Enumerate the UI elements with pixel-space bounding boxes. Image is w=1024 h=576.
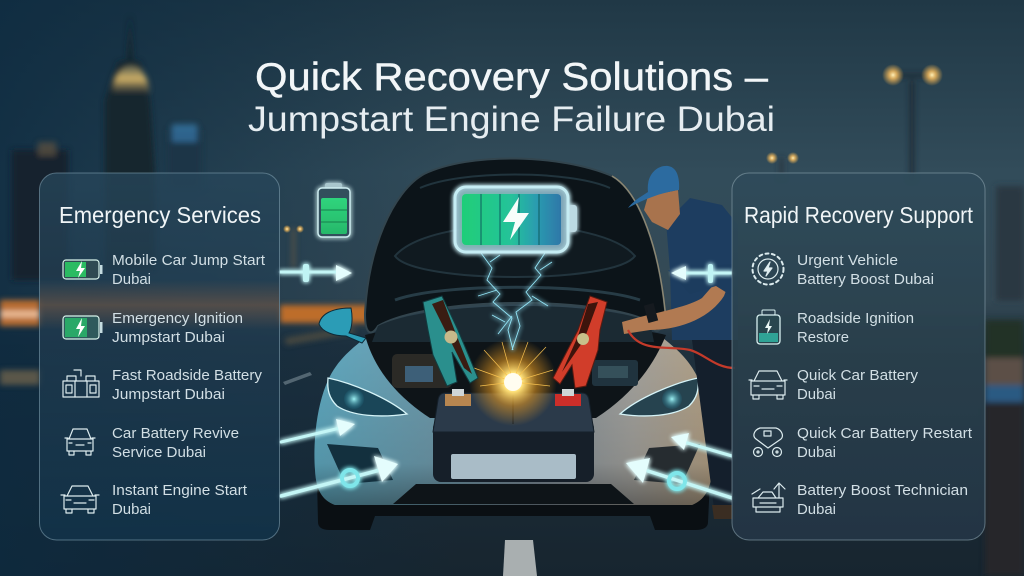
- arrow: quick battery restart: [671, 433, 732, 456]
- wing mirror: [319, 308, 366, 343]
- item: roadside ignition: Roadside Ignition: [797, 311, 914, 327]
- panel: rapid recovery support: [732, 173, 985, 540]
- item: fast roadside battery: Fast Roadside Battery: [112, 368, 263, 384]
- item: quick battery restart: Quick Car Battery Restart: [797, 426, 972, 442]
- small battery icon: [318, 183, 350, 237]
- battery body: [433, 420, 594, 482]
- arrow: mobile jump start: [280, 264, 352, 282]
- battery top: [433, 393, 594, 432]
- arrow: urgent vehicle boost: [671, 264, 732, 283]
- mechanic cap: [628, 166, 679, 208]
- open hood: [365, 158, 666, 332]
- item: instant engine start: [61, 483, 247, 518]
- car body: [314, 338, 713, 505]
- icon: battery: [63, 260, 102, 279]
- icon: car: [61, 486, 99, 513]
- item: car battery revive: Service Dubai: [112, 445, 206, 461]
- title: Jumpstart Engine Failure Dubai: [248, 100, 775, 139]
- mechanic head: [644, 190, 680, 230]
- item: emergency ignition: Jumpstart Dubai: [112, 330, 225, 346]
- engine bay: [365, 324, 666, 418]
- item: battery boost technician: Battery Boost Technician: [797, 483, 968, 499]
- green clamp: [423, 296, 478, 386]
- right headlight: [620, 378, 698, 416]
- car battery: [433, 389, 594, 482]
- car wheels and underbody: [317, 480, 710, 530]
- item: urgent vehicle boost: Urgent Vehicle: [797, 253, 898, 269]
- item: battery boost technician: Dubai: [797, 502, 836, 518]
- item: roadside ignition: Restore: [797, 330, 849, 346]
- sparks: [469, 338, 557, 426]
- item: fast roadside battery: [63, 368, 263, 403]
- item: urgent vehicle boost: [752, 253, 934, 288]
- title: [248, 56, 775, 139]
- icon: car lift arrow: [752, 483, 785, 512]
- item: quick car battery: Dubai: [797, 387, 836, 403]
- item: mobile car jump start: [63, 253, 265, 288]
- arrow: battery boost technician: [626, 458, 732, 498]
- terminals: [445, 394, 471, 406]
- item: battery boost technician: [752, 483, 968, 518]
- item: emergency ignition: Emergency Ignition: [112, 311, 243, 327]
- item: car battery revive: [65, 426, 239, 461]
- icon: car: [749, 371, 787, 399]
- heading: Emergency Services: [59, 202, 261, 228]
- item: instant engine start: Dubai: [112, 502, 151, 518]
- icon: sun bolt: [752, 254, 784, 284]
- item: quick car battery: [749, 368, 919, 403]
- red clamp: [553, 296, 607, 388]
- item: mobile car jump start: Mobile Car Jump Start: [112, 253, 265, 269]
- item: instant engine start: Instant Engine Start: [112, 483, 247, 499]
- arrow: instant engine start: [281, 456, 398, 496]
- car: [314, 158, 713, 530]
- glowing battery hologram: [455, 187, 577, 252]
- panel background: [40, 173, 280, 540]
- blank plate: [451, 454, 576, 479]
- item: quick battery restart: [754, 426, 972, 461]
- item: mobile car jump start: Dubai: [112, 272, 151, 288]
- icon: battery: [757, 310, 780, 344]
- arrow: battery revive: [281, 419, 355, 442]
- item: roadside ignition: [757, 310, 914, 346]
- icon: car: [65, 429, 95, 455]
- item: fast roadside battery: Jumpstart Dubai: [112, 387, 225, 403]
- left headlight: [328, 378, 407, 416]
- mechanic arm: [622, 280, 730, 334]
- icon: jump box: [63, 370, 99, 397]
- red jumper cable: [628, 330, 735, 368]
- item: quick car battery: Quick Car Battery: [797, 368, 919, 384]
- panel background: [732, 173, 985, 540]
- mechanic body: [666, 198, 738, 340]
- item: emergency ignition: [63, 311, 243, 346]
- icon: car chassis: [754, 428, 782, 456]
- panel: emergency services: [40, 173, 280, 540]
- connector arrows: [280, 264, 732, 498]
- bumper grille: [393, 484, 634, 504]
- icon: battery: [63, 316, 102, 339]
- item: urgent vehicle boost: Battery Boost Dubai: [797, 272, 934, 288]
- heading: Rapid Recovery Support: [744, 202, 974, 228]
- lightning bolts: [478, 253, 552, 350]
- item: quick battery restart: Dubai: [797, 445, 836, 461]
- title: Quick Recovery Solutions –: [255, 56, 768, 99]
- item: car battery revive: Car Battery Revive: [112, 426, 239, 442]
- mechanic: [622, 166, 738, 519]
